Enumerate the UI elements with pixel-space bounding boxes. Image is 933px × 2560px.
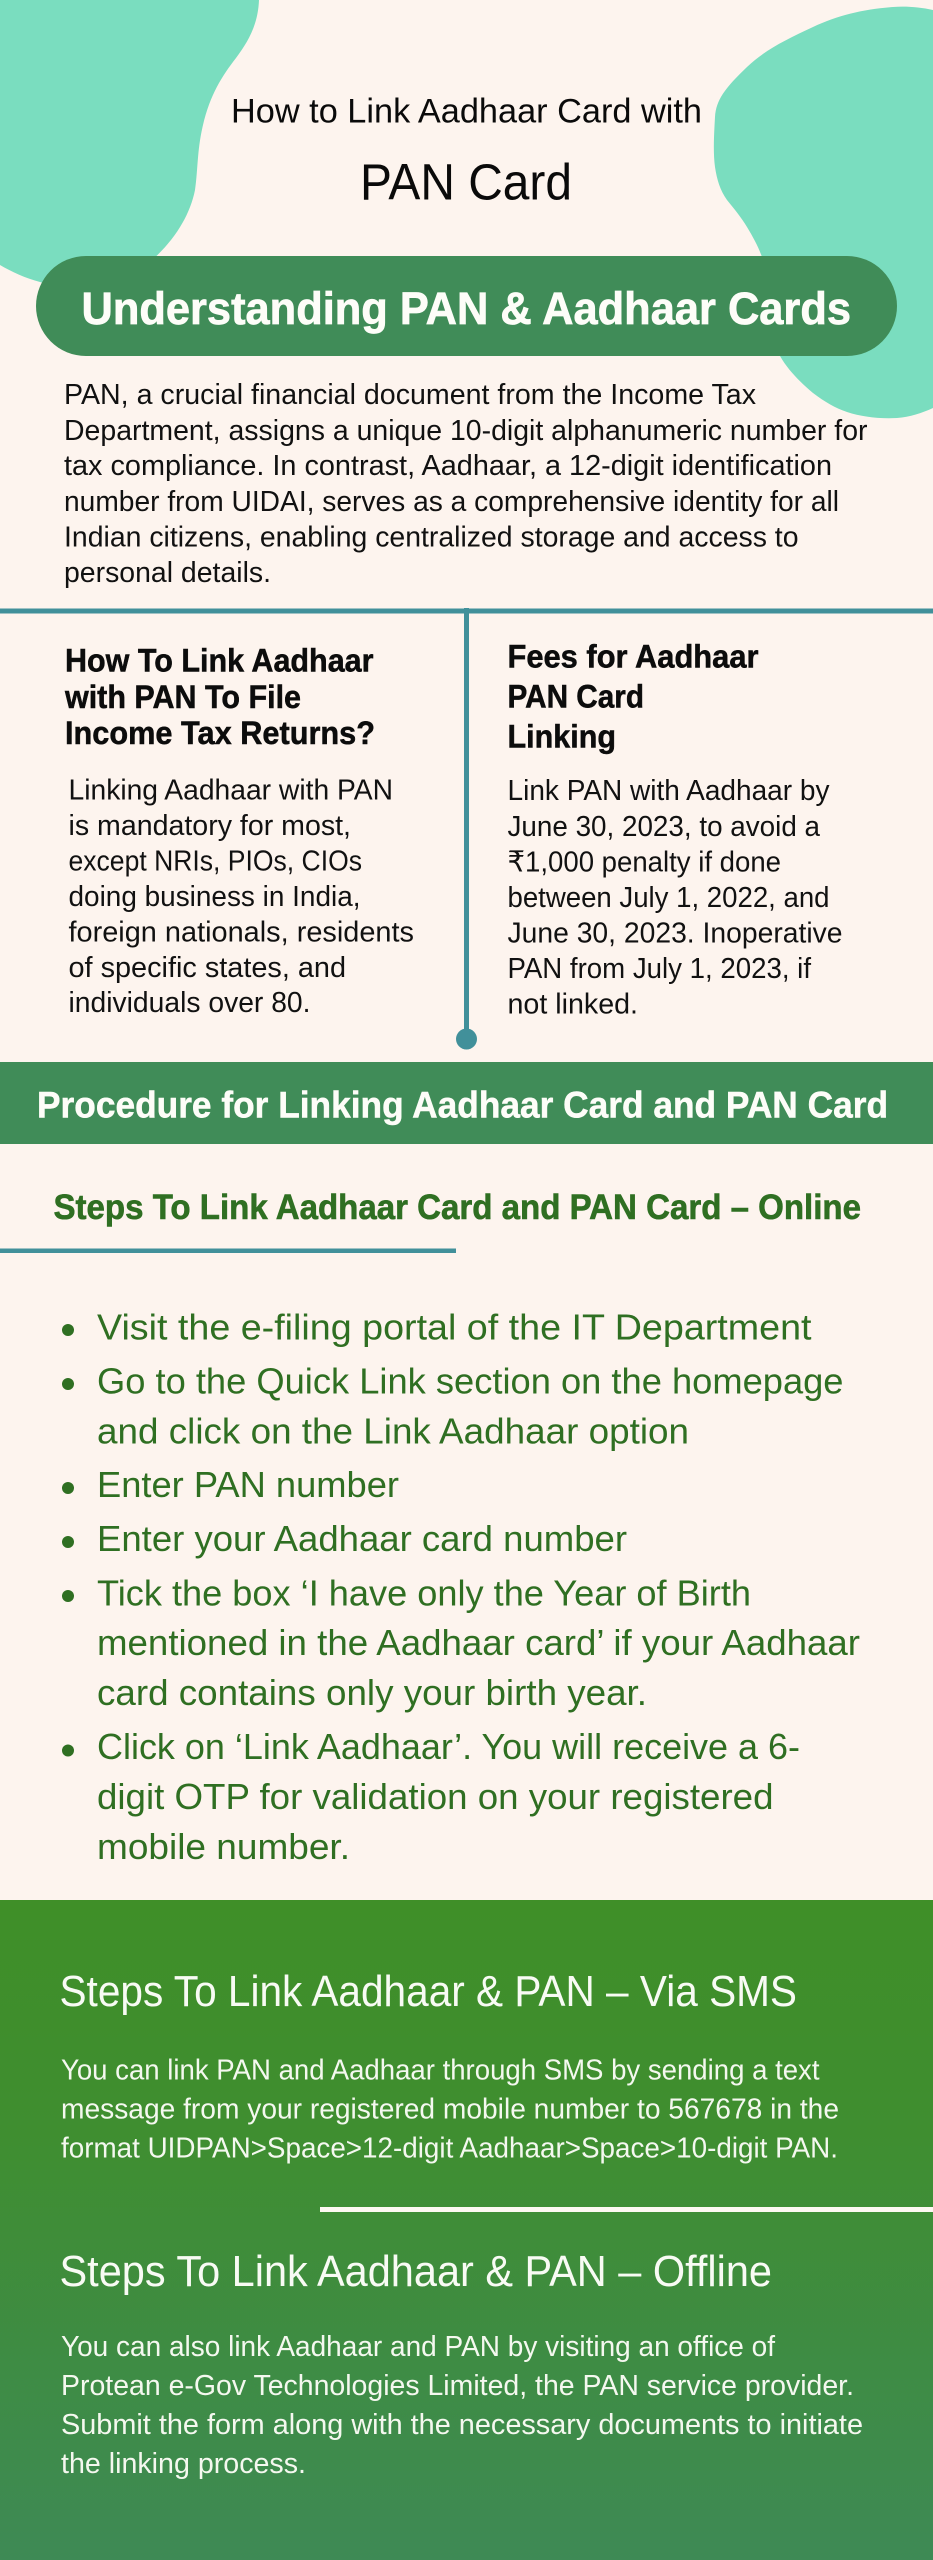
left column body: of specific states, and: [68, 952, 346, 984]
left column heading: Income Tax Returns?: [65, 715, 375, 751]
intro paragraph: tax compliance. In contrast, Aadhaar, a 12-digit identification: [64, 450, 832, 482]
bullet list: online steps: Enter PAN number: [97, 1464, 399, 1505]
left column body: individuals over 80.: [68, 987, 310, 1019]
bullet list: online steps: Enter your Aadhaar card number: [97, 1518, 627, 1559]
heading: offline: Steps To Link Aadhaar & PAN – Offline: [60, 2247, 772, 2296]
left column heading: with PAN To File: [64, 679, 301, 715]
decorative blob: top right: [714, 7, 933, 418]
heading: online steps: Steps To Link Aadhaar Card and PAN Card – Online: [54, 1188, 861, 1227]
text: via SMS: You can link PAN and Aadhaar through SMS by sending a text: [61, 2054, 820, 2086]
intro paragraph: [64, 379, 868, 589]
left column body: foreign nationals, residents: [68, 916, 414, 948]
right column body: June 30, 2023, to avoid a: [508, 811, 821, 843]
heading pill: Understanding PAN & Aadhaar Cards: [36, 256, 897, 356]
text: via SMS: [61, 2054, 839, 2164]
bullet list: online steps: mobile number.: [97, 1826, 350, 1867]
intro paragraph: Department, assigns a unique 10-digit alphanumeric number for: [64, 415, 868, 447]
left column body: doing business in India,: [68, 881, 360, 913]
left column heading: [64, 642, 375, 751]
right column body: ₹1,000 penalty if done: [508, 846, 781, 878]
bullet list: online steps: Click on ‘Link Aadhaar’. You will receive a 6-: [97, 1726, 800, 1767]
right column heading: Fees for Aadhaar: [508, 638, 758, 674]
divider: white line: [320, 2207, 933, 2212]
left column heading: How To Link Aadhaar: [65, 642, 374, 678]
banner: procedure heading: [0, 1062, 933, 1144]
text: offline: Protean e-Gov Technologies Limited, the PAN service provider.: [61, 2370, 854, 2402]
underline: online steps: [0, 1248, 456, 1253]
intro paragraph: PAN, a crucial financial document from the Income Tax: [64, 379, 756, 411]
intro paragraph: personal details.: [64, 557, 271, 589]
panel: green background for SMS and offline steps: [0, 1900, 933, 2560]
left column body: [68, 774, 414, 1019]
bullet list: online steps: card contains only your birth year.: [97, 1672, 647, 1713]
intro paragraph: Indian citizens, enabling centralized storage and access to: [64, 522, 798, 554]
heading pill: Understanding PAN & Aadhaar Cards: Understanding PAN & Aadhaar Cards: [82, 283, 851, 334]
right column heading: [508, 638, 758, 754]
title: How to Link Aadhaar Card with: [231, 92, 702, 130]
right column heading: PAN Card: [508, 678, 644, 714]
left column body: except NRIs, PIOs, CIOs: [68, 846, 362, 878]
right column body: not linked.: [508, 988, 638, 1020]
text: offline: [61, 2331, 863, 2480]
right column body: Link PAN with Aadhaar by: [508, 775, 830, 807]
banner: procedure heading: Procedure for Linking Aadhaar Card and PAN Card: [37, 1084, 888, 1126]
heading: via SMS: Steps To Link Aadhaar & PAN – Via SMS: [60, 1967, 797, 2016]
bullet list: online steps: digit OTP for validation on your registered: [97, 1776, 774, 1817]
bullet list: online steps: Go to the Quick Link section on the homepage: [97, 1360, 844, 1402]
right column body: June 30, 2023. Inoperative: [508, 918, 842, 950]
intro paragraph: number from UIDAI, serves as a comprehensive identity for all: [64, 486, 839, 518]
left column body: is mandatory for most,: [68, 810, 351, 842]
left column body: Linking Aadhaar with PAN: [68, 774, 393, 806]
bullet list: online steps: Visit the e-filing portal of the IT Department: [97, 1306, 812, 1348]
text: offline: Submit the form along with the necessary documents to initiate: [61, 2409, 863, 2441]
bullet list: online steps: and click on the Link Aadhaar option: [97, 1410, 689, 1452]
right column body: [508, 775, 842, 1020]
divider: horizontal and vertical teal lines with dot: [0, 608, 933, 1050]
bullet list: online steps: Tick the box ‘I have only the Year of Birth: [97, 1572, 751, 1614]
bullet list: online steps: mentioned in the Aadhaar card’ if your Aadhaar: [97, 1622, 860, 1663]
text: via SMS: format UIDPAN>Space>12-digit Aadhaar>Space>10-digit PAN.: [61, 2132, 838, 2164]
bullet list: online steps: [62, 1306, 860, 1867]
text: offline: the linking process.: [61, 2448, 306, 2480]
text: offline: You can also link Aadhaar and PAN by visiting an office of: [61, 2331, 776, 2363]
right column body: PAN from July 1, 2023, if: [508, 953, 812, 985]
title: PAN Card: [360, 154, 572, 210]
decorative blob: top left: [0, 0, 259, 286]
text: via SMS: message from your registered mobile number to 567678 in the: [61, 2094, 839, 2126]
right column heading: Linking: [508, 718, 616, 754]
title: [231, 92, 702, 210]
right column body: between July 1, 2022, and: [508, 882, 830, 914]
